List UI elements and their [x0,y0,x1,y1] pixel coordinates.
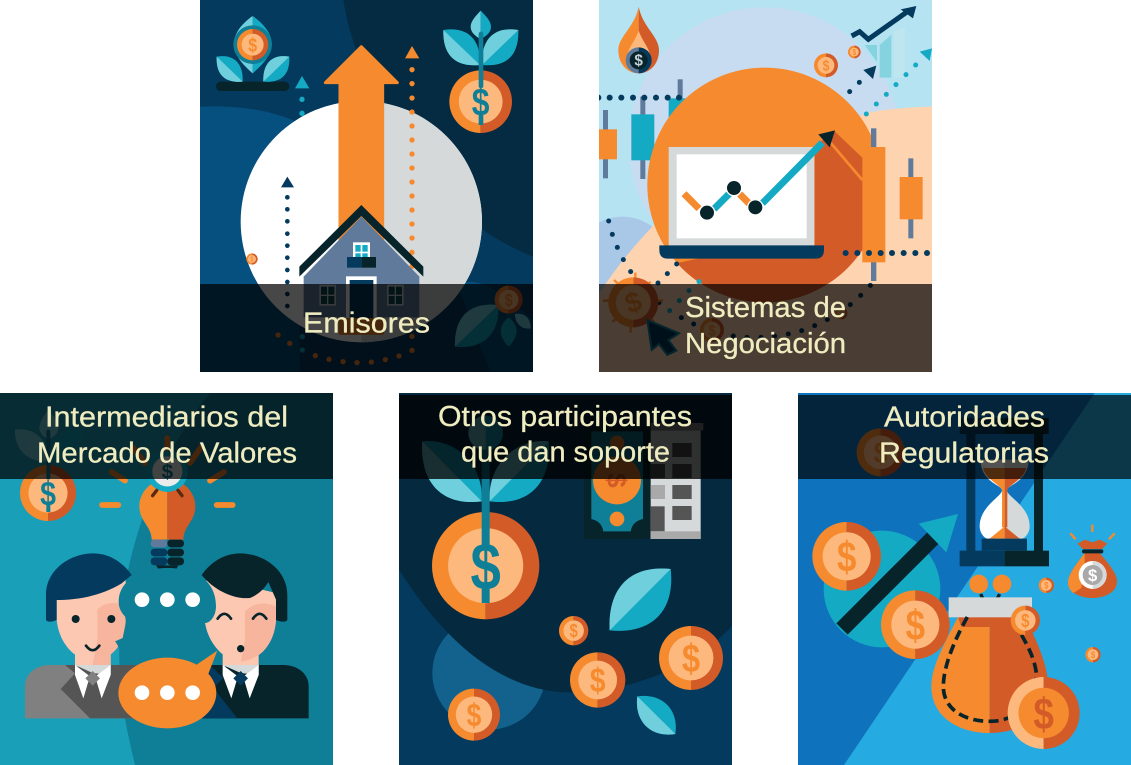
caption: Emisores: Emisores [303,308,430,340]
coin: under caption [700,318,724,342]
coin: on purse clasp [1011,606,1040,635]
icon: cursor [647,320,679,355]
dotted line: bottom right [843,250,930,256]
icon: gear coin: $ [621,285,646,320]
caption: Otros participantes que dan soporte: Otros participantes [438,401,692,433]
coin: lower left [881,590,950,659]
icon: plant with big coin: $ [470,529,501,603]
caption: Sistemas de Negociación [599,284,932,372]
icon: rising trend arrow with bars [852,6,932,79]
coin: under caption right [835,307,847,319]
coin: small center [1039,578,1054,593]
icon: light bulb [139,451,195,576]
dotted arrow: teal [295,76,309,353]
icon: hourglass [960,418,1049,566]
panel: Autoridades Regulatorias [798,393,1131,765]
caption: Sistemas de Negociación: Sistemas de [685,292,846,324]
arrow: diagonal [842,514,958,629]
caption: Autoridades Regulatorias [798,395,1131,479]
figure: man left [25,553,143,718]
icon: small plant with coin [216,16,289,91]
speech bubble: teal [115,568,216,648]
speech bubble: orange [118,651,217,728]
icon: leaves with coin, bottom right: $ [505,292,513,310]
coin: right [659,626,723,690]
coin: upper left: $ [837,534,857,581]
icon: house [299,205,423,318]
icon: plant coin [15,410,82,521]
coin: under caption right: $ [840,311,843,318]
panel: Emisores [200,0,533,372]
icon: banknote [584,426,651,539]
coin: top dim: $ [874,436,887,469]
coin: large bottom: $ [1033,688,1054,739]
icon: banknote: $ [602,473,632,488]
dotted arrow: orange [275,46,419,365]
icon: light bulb: $ [162,461,174,484]
coin: lower left: $ [906,603,925,650]
icon: leaf small [637,696,676,735]
candlesticks: right [862,128,923,281]
candlesticks: left [599,79,689,179]
illustration: laptop with trading chart [572,0,932,372]
caption: Emisores [200,284,533,372]
dotted lines: navy and teal [606,62,918,340]
icon: plant with coin: $ [472,80,490,124]
icon: leaves with coin, bottom right [455,286,531,347]
icon: plant coin: $ [40,474,56,513]
coin: small right [1085,647,1101,662]
illustration: two people talking [0,393,333,765]
coin: large bottom [1008,677,1080,749]
coin: medium [814,53,838,77]
coin: upper left [812,522,881,591]
coin: small right: $ [1091,649,1095,660]
illustration: hourglass, purse and coins [798,393,1131,765]
coin: small: $ [570,621,578,641]
caption: Otros participantes que dan soporte: que dan soporte [461,436,670,468]
coin: small [246,253,258,265]
circle: orange backdrop [647,68,871,302]
icon: gear coin [603,273,663,333]
coin: top dim [857,428,905,476]
coin: small center: $ [1044,580,1049,591]
figure: man right [200,553,309,718]
illustration: plant, bill, building and coins [399,393,732,765]
icon: purse [931,575,1048,733]
caption: Sistemas de Negociación: Negociación [685,328,846,360]
coin: bottom left: $ [467,698,481,734]
coin: medium: $ [823,57,830,74]
icon: small plant with coin: $ [248,34,257,56]
dotted line: top [595,95,682,101]
arrow: orange up [325,47,397,333]
icon: flame drop with coin: $ [634,53,643,70]
coin: small [848,46,861,58]
dotted arrow: navy [281,177,294,308]
icon: leaf large [610,568,671,631]
icon: building [651,423,703,539]
caption: Intermediarios del Mercado de Valores [0,393,333,479]
coin: center [570,652,625,708]
coin: under caption: $ [709,322,716,339]
icon: money bag [1068,525,1117,598]
icon: money bag: $ [1088,566,1098,585]
caption: Otros participantes que dan soporte [399,395,732,479]
caption: Intermediarios del Mercado de Valores: Intermediarios del [45,402,288,434]
panel: Otros participantes que dan soporte [399,393,732,765]
panel: Intermediarios del Mercado de Valores [0,393,333,765]
illustration: house with rising arrow [200,0,533,372]
coin: on purse clasp: $ [1021,610,1030,631]
icon: plant with big coin [422,416,549,619]
coin: bottom left [448,689,500,741]
caption: Autoridades Regulatorias: Regulatorias [879,438,1049,470]
icon: plant with coin [443,11,518,133]
coin: small: $ [853,48,856,57]
icon: laptop with line chart [659,130,862,259]
caption: Intermediarios del Mercado de Valores: Mercado de Valores [37,438,297,470]
coin: small [559,616,588,645]
coin: center: $ [590,662,605,700]
caption: Autoridades Regulatorias: Autoridades [884,402,1045,434]
panel: Sistemas de Negociación [572,0,932,372]
coin: right: $ [682,636,700,681]
icon: rays [102,438,233,505]
icon: flame drop with coin [618,7,659,73]
coin: small: $ [250,256,254,264]
